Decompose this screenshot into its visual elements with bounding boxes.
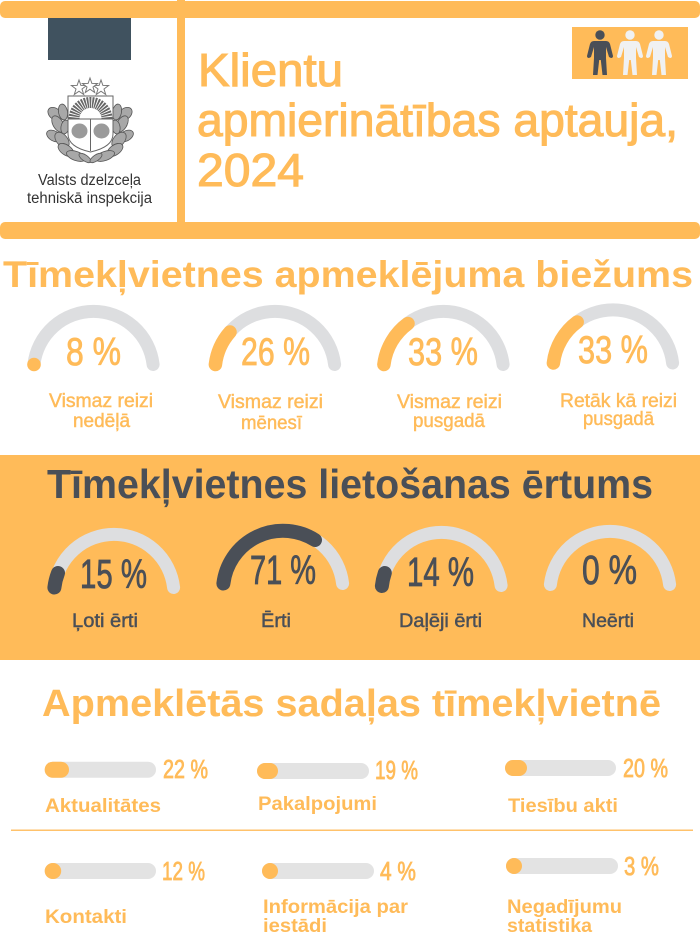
- gauge: 8 % at least weekly: 8 %: [66, 331, 121, 374]
- gauge: 26 % at least monthly: Vismaz reizi: [218, 392, 323, 413]
- logo text: [27, 172, 152, 207]
- heading: visited sections: Apmeklētās sadaļas tīmekļvietnē: [42, 683, 661, 725]
- gauge: 8 % at least weekly: [27, 311, 153, 432]
- gauge: 14 % partly easy: 14 %: [407, 549, 474, 595]
- heading: ease of use: Tīmekļvietnes lietošanas ērtums: [47, 461, 653, 507]
- bar: Aktualitātes 22 %: 22 %: [163, 754, 208, 784]
- bar: Kontakti 12 %: 12 %: [162, 856, 205, 886]
- bar: Aktualitātes 22 %: [45, 754, 208, 817]
- gauge: 26 % at least monthly: [215, 311, 335, 434]
- title: apmierinātības aptauja,: [197, 94, 678, 146]
- gauge: 0 % not easy: Neērti: [582, 611, 634, 632]
- logo text: tehniskā inspekcija: [27, 190, 152, 207]
- bar: Tiesību akti 20 %: [505, 753, 668, 817]
- title: Klientu: [198, 44, 343, 96]
- gauge: 0 % not easy: [550, 531, 670, 632]
- bar: Informācija par iestādi 4 %: Informācija par: [263, 896, 408, 918]
- gauge: 71 % easy: 71 %: [250, 547, 316, 593]
- gauge: 8 % at least weekly: nedēļā: [73, 411, 130, 432]
- gauge: 33 % less than twice a year: Retāk kā reizi: [560, 391, 677, 412]
- bar: Tiesību akti 20 %: 20 %: [623, 753, 668, 783]
- icon: three people: [572, 27, 688, 79]
- gauge: 26 % at least monthly: 26 %: [241, 331, 310, 374]
- bar: Pakalpojumi 19 %: [257, 755, 418, 815]
- gauge: 33 % at least twice a year: Vismaz reizi: [397, 392, 502, 413]
- logo text: Valsts dzelzceļa: [38, 172, 141, 189]
- bar: Informācija par iestādi 4 %: [262, 856, 416, 933]
- title: [197, 44, 678, 196]
- gauge: 33 % less than twice a year: [553, 310, 677, 430]
- title: 2024: [197, 144, 304, 196]
- gauge: 15 % very easy: Ļoti ērti: [72, 611, 138, 632]
- dark logo block: [48, 18, 131, 60]
- icon: coat of arms: [45, 78, 135, 164]
- header frame: [0, 0, 700, 239]
- bar: Pakalpojumi 19 %: 19 %: [375, 755, 418, 785]
- bar: Kontakti 12 %: [45, 856, 205, 928]
- bar: Negadījumu statistika 3 %: Negadījumu: [507, 896, 622, 918]
- gauge: 8 % at least weekly: Vismaz reizi: [49, 391, 153, 412]
- gauge: 33 % at least twice a year: pusgadā: [413, 411, 485, 432]
- gauge: 33 % less than twice a year: 33 %: [578, 329, 648, 372]
- gauge: 26 % at least monthly: mēnesī: [241, 413, 303, 434]
- gauge: 15 % very easy: 15 %: [80, 551, 147, 597]
- gauge: 15 % very easy: [54, 534, 174, 632]
- gauge: 71 % easy: [223, 530, 343, 632]
- gauge: 33 % less than twice a year: pusgadā: [583, 409, 654, 430]
- gauge: 14 % partly easy: [382, 532, 501, 632]
- bar: Informācija par iestādi 4 %: 4 %: [380, 856, 416, 886]
- bar: Negadījumu statistika 3 %: [506, 851, 659, 933]
- bar: Pakalpojumi 19 %: Pakalpojumi: [258, 793, 377, 815]
- gauge: 33 % at least twice a year: 33 %: [408, 331, 478, 374]
- gauge: 71 % easy: Ērti: [261, 611, 291, 632]
- bar: Aktualitātes 22 %: Aktualitātes: [45, 795, 161, 817]
- gauge: 0 % not easy: 0 %: [582, 547, 637, 593]
- bar: Negadījumu statistika 3 %: 3 %: [624, 851, 659, 881]
- heading: visit frequency: Tīmekļvietnes apmeklējuma biežums: [3, 254, 693, 296]
- gauge: 33 % at least twice a year: [384, 311, 503, 432]
- panel: ease of use: [0, 455, 700, 660]
- gauge: 14 % partly easy: Daļēji ērti: [399, 611, 482, 632]
- bar: Tiesību akti 20 %: Tiesību akti: [508, 795, 618, 817]
- bar: Kontakti 12 %: Kontakti: [45, 906, 127, 928]
